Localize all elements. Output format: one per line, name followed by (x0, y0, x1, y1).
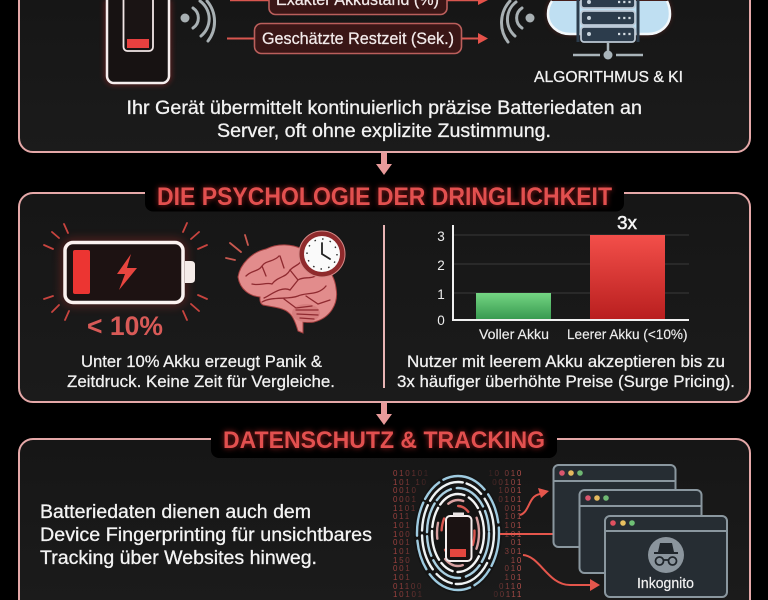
label: incognito: Inkognito (637, 576, 694, 592)
panel: psychology of urgency (19, 177, 750, 402)
bar chart: acceptance of surge pricing: 0 (437, 313, 445, 328)
binary background left: 101 (393, 547, 411, 556)
text: transmission description: Server, oft ohne explizite Zustimmung. (217, 121, 551, 142)
icon: fingerprint with battery (414, 473, 502, 593)
binary background left: 01100 (393, 582, 423, 591)
heading: privacy: DATENSCHUTZ & TRACKING (223, 427, 545, 454)
bar chart: acceptance of surge pricing: Leerer Akku (<10%) (567, 327, 688, 342)
binary background right: 00111 (493, 590, 523, 599)
binary background right: 101 (505, 512, 523, 521)
icon: low battery with alert rays (44, 223, 207, 320)
arrow: to window one (520, 488, 549, 515)
text: fingerprinting explanation (40, 501, 372, 569)
icon: cloud server (548, 0, 670, 60)
binary background right: 010 (505, 564, 523, 573)
browser window: incognito (605, 516, 727, 597)
icon: brain with clock (226, 231, 345, 333)
bar chart: acceptance of surge pricing (437, 213, 689, 342)
binary background right: 1001 (498, 486, 523, 495)
binary background left: 10101 (393, 590, 424, 599)
arrow: to privacy (376, 403, 392, 425)
binary background right: 01 (511, 538, 523, 547)
binary background right: 10 010 (488, 469, 523, 478)
binary background right: 101 (505, 521, 523, 530)
binary background right: 001 (505, 504, 523, 513)
binary background left: 1101 (393, 504, 417, 513)
text: surge pricing explanation: 3x häufiger überhöhte Preise (Surge Pricing). (397, 373, 735, 391)
binary background left: 011 (393, 512, 411, 521)
text: panic explanation (67, 353, 335, 391)
browser window: first (554, 465, 676, 547)
label: under 10 percent: < 10% (87, 311, 163, 341)
binary background right: 101 (505, 530, 523, 539)
heading: psychology: DIE PSYCHOLOGIE DER DRINGLICHKEIT (157, 183, 612, 211)
binary background left: 101 (393, 521, 411, 530)
panel: data transmission (19, 0, 750, 152)
binary background left: 001 (393, 538, 411, 547)
binary background right: 0110 (499, 582, 523, 591)
label: algorithm and AI: ALGORITHMUS & KI (534, 69, 683, 86)
binary background right: 0101 (498, 495, 523, 504)
bar chart: acceptance of surge pricing: 1 (437, 287, 445, 302)
data row: battery level (230, 0, 488, 14)
text: transmission description: Ihr Gerät übermittelt kontinuierlich präzise Batteriedaten an (126, 98, 642, 119)
text: fingerprinting explanation: Device Fingerprinting für unsichtbares (40, 524, 372, 546)
data row: remaining time: Geschätzte Restzeit (Sek.) (262, 30, 454, 48)
text: surge pricing explanation (397, 353, 735, 391)
icon: wifi signal right (502, 1, 534, 42)
text: panic explanation: Zeitdruck. Keine Zeit für Vergleiche. (67, 373, 335, 391)
binary background right: 10 (511, 556, 523, 565)
divider (383, 225, 385, 388)
icon: phone with low battery (107, 0, 169, 83)
text: fingerprinting explanation: Batteriedaten dienen auch dem (40, 501, 311, 523)
binary background left: 001 (393, 564, 411, 573)
binary background right: 00101 (492, 478, 523, 487)
bar chart: acceptance of surge pricing: 3x (617, 213, 637, 233)
text: panic explanation: Unter 10% Akku erzeugt Panik & (81, 353, 322, 371)
binary background right: 301 (505, 547, 523, 556)
binary background left: 101 10 (393, 478, 428, 487)
bar chart: acceptance of surge pricing: Voller Akku (479, 327, 549, 342)
binary background left: 100 (393, 530, 411, 539)
text: transmission description (126, 98, 642, 142)
binary background right: 101 (505, 573, 523, 582)
binary background left: 010101 (393, 469, 430, 478)
binary background right (488, 469, 523, 599)
bar chart: acceptance of surge pricing: 2 (437, 258, 445, 273)
icon: incognito hat and glasses (648, 537, 684, 573)
binary background left: 150 (393, 556, 411, 565)
icon: wifi signal left (180, 1, 215, 41)
binary background left: 101 (393, 573, 411, 582)
text: surge pricing explanation: Nutzer mit leerem Akku akzeptieren bis zu (407, 353, 725, 371)
bar chart: acceptance of surge pricing: 3 (437, 229, 445, 244)
browser window: second (580, 490, 702, 573)
binary background left (393, 469, 430, 599)
binary background left: 0010 (393, 486, 418, 495)
arrow: to incognito window (523, 555, 600, 591)
binary background left: 0001 (393, 495, 418, 504)
text: fingerprinting explanation: Tracking über Websites hinweg. (40, 547, 317, 569)
data row: remaining time (227, 24, 488, 54)
panel: privacy and tracking (19, 426, 750, 600)
arrow: to window two (500, 528, 574, 540)
arrow: to psychology (376, 153, 392, 175)
